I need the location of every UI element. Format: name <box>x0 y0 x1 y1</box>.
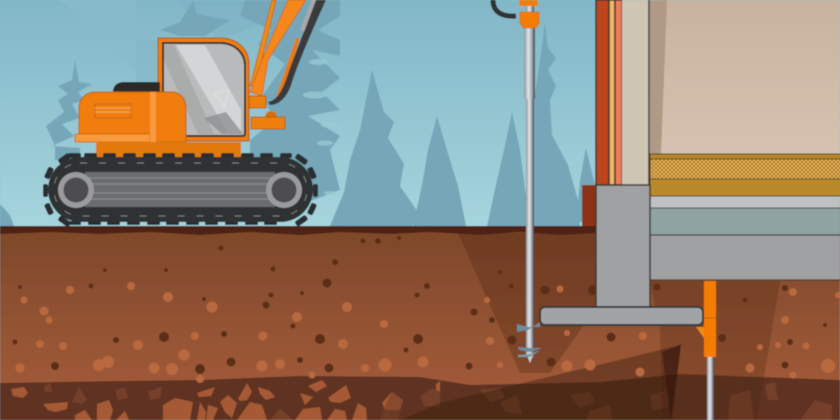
foundation wall <box>596 185 650 308</box>
soil ground <box>0 226 840 420</box>
interior wall shadow <box>650 0 667 154</box>
drive head <box>520 12 539 28</box>
excavator engine housing <box>75 92 186 142</box>
excavator cab <box>158 38 249 141</box>
dark soil specks <box>12 236 827 374</box>
background pine trees <box>0 0 595 226</box>
excavator boom arm <box>249 0 326 129</box>
top coupler <box>519 0 538 6</box>
auger shaft <box>526 0 534 355</box>
left track wheel <box>58 172 94 208</box>
light cuts in the large tree <box>303 59 339 195</box>
hydraulic hose <box>493 0 516 16</box>
engine cover dark top <box>113 82 160 94</box>
concrete footing <box>540 307 703 325</box>
ground crust <box>0 226 840 235</box>
excavator <box>43 0 326 227</box>
helical pier being driven <box>493 0 542 363</box>
concrete slab <box>650 235 840 280</box>
house foundation cross-section <box>540 0 840 420</box>
wall layers <box>596 0 649 185</box>
shadow wedges under the foundation <box>458 233 596 373</box>
interior wall <box>650 0 840 155</box>
screw tip <box>517 322 542 363</box>
pier steel shaft <box>707 356 714 420</box>
right track wheel <box>266 172 302 208</box>
excavator undercarriage <box>96 142 241 158</box>
outer brick footing <box>582 185 596 226</box>
light soil pebbles <box>16 282 840 383</box>
rocks <box>11 380 440 420</box>
pier orange bracket <box>704 281 716 357</box>
floor layers <box>650 154 840 235</box>
crawler track <box>43 153 318 227</box>
underpinning pier <box>696 281 716 420</box>
sky background <box>0 0 840 230</box>
rock layer <box>0 374 840 420</box>
drive sleeve <box>524 28 535 99</box>
